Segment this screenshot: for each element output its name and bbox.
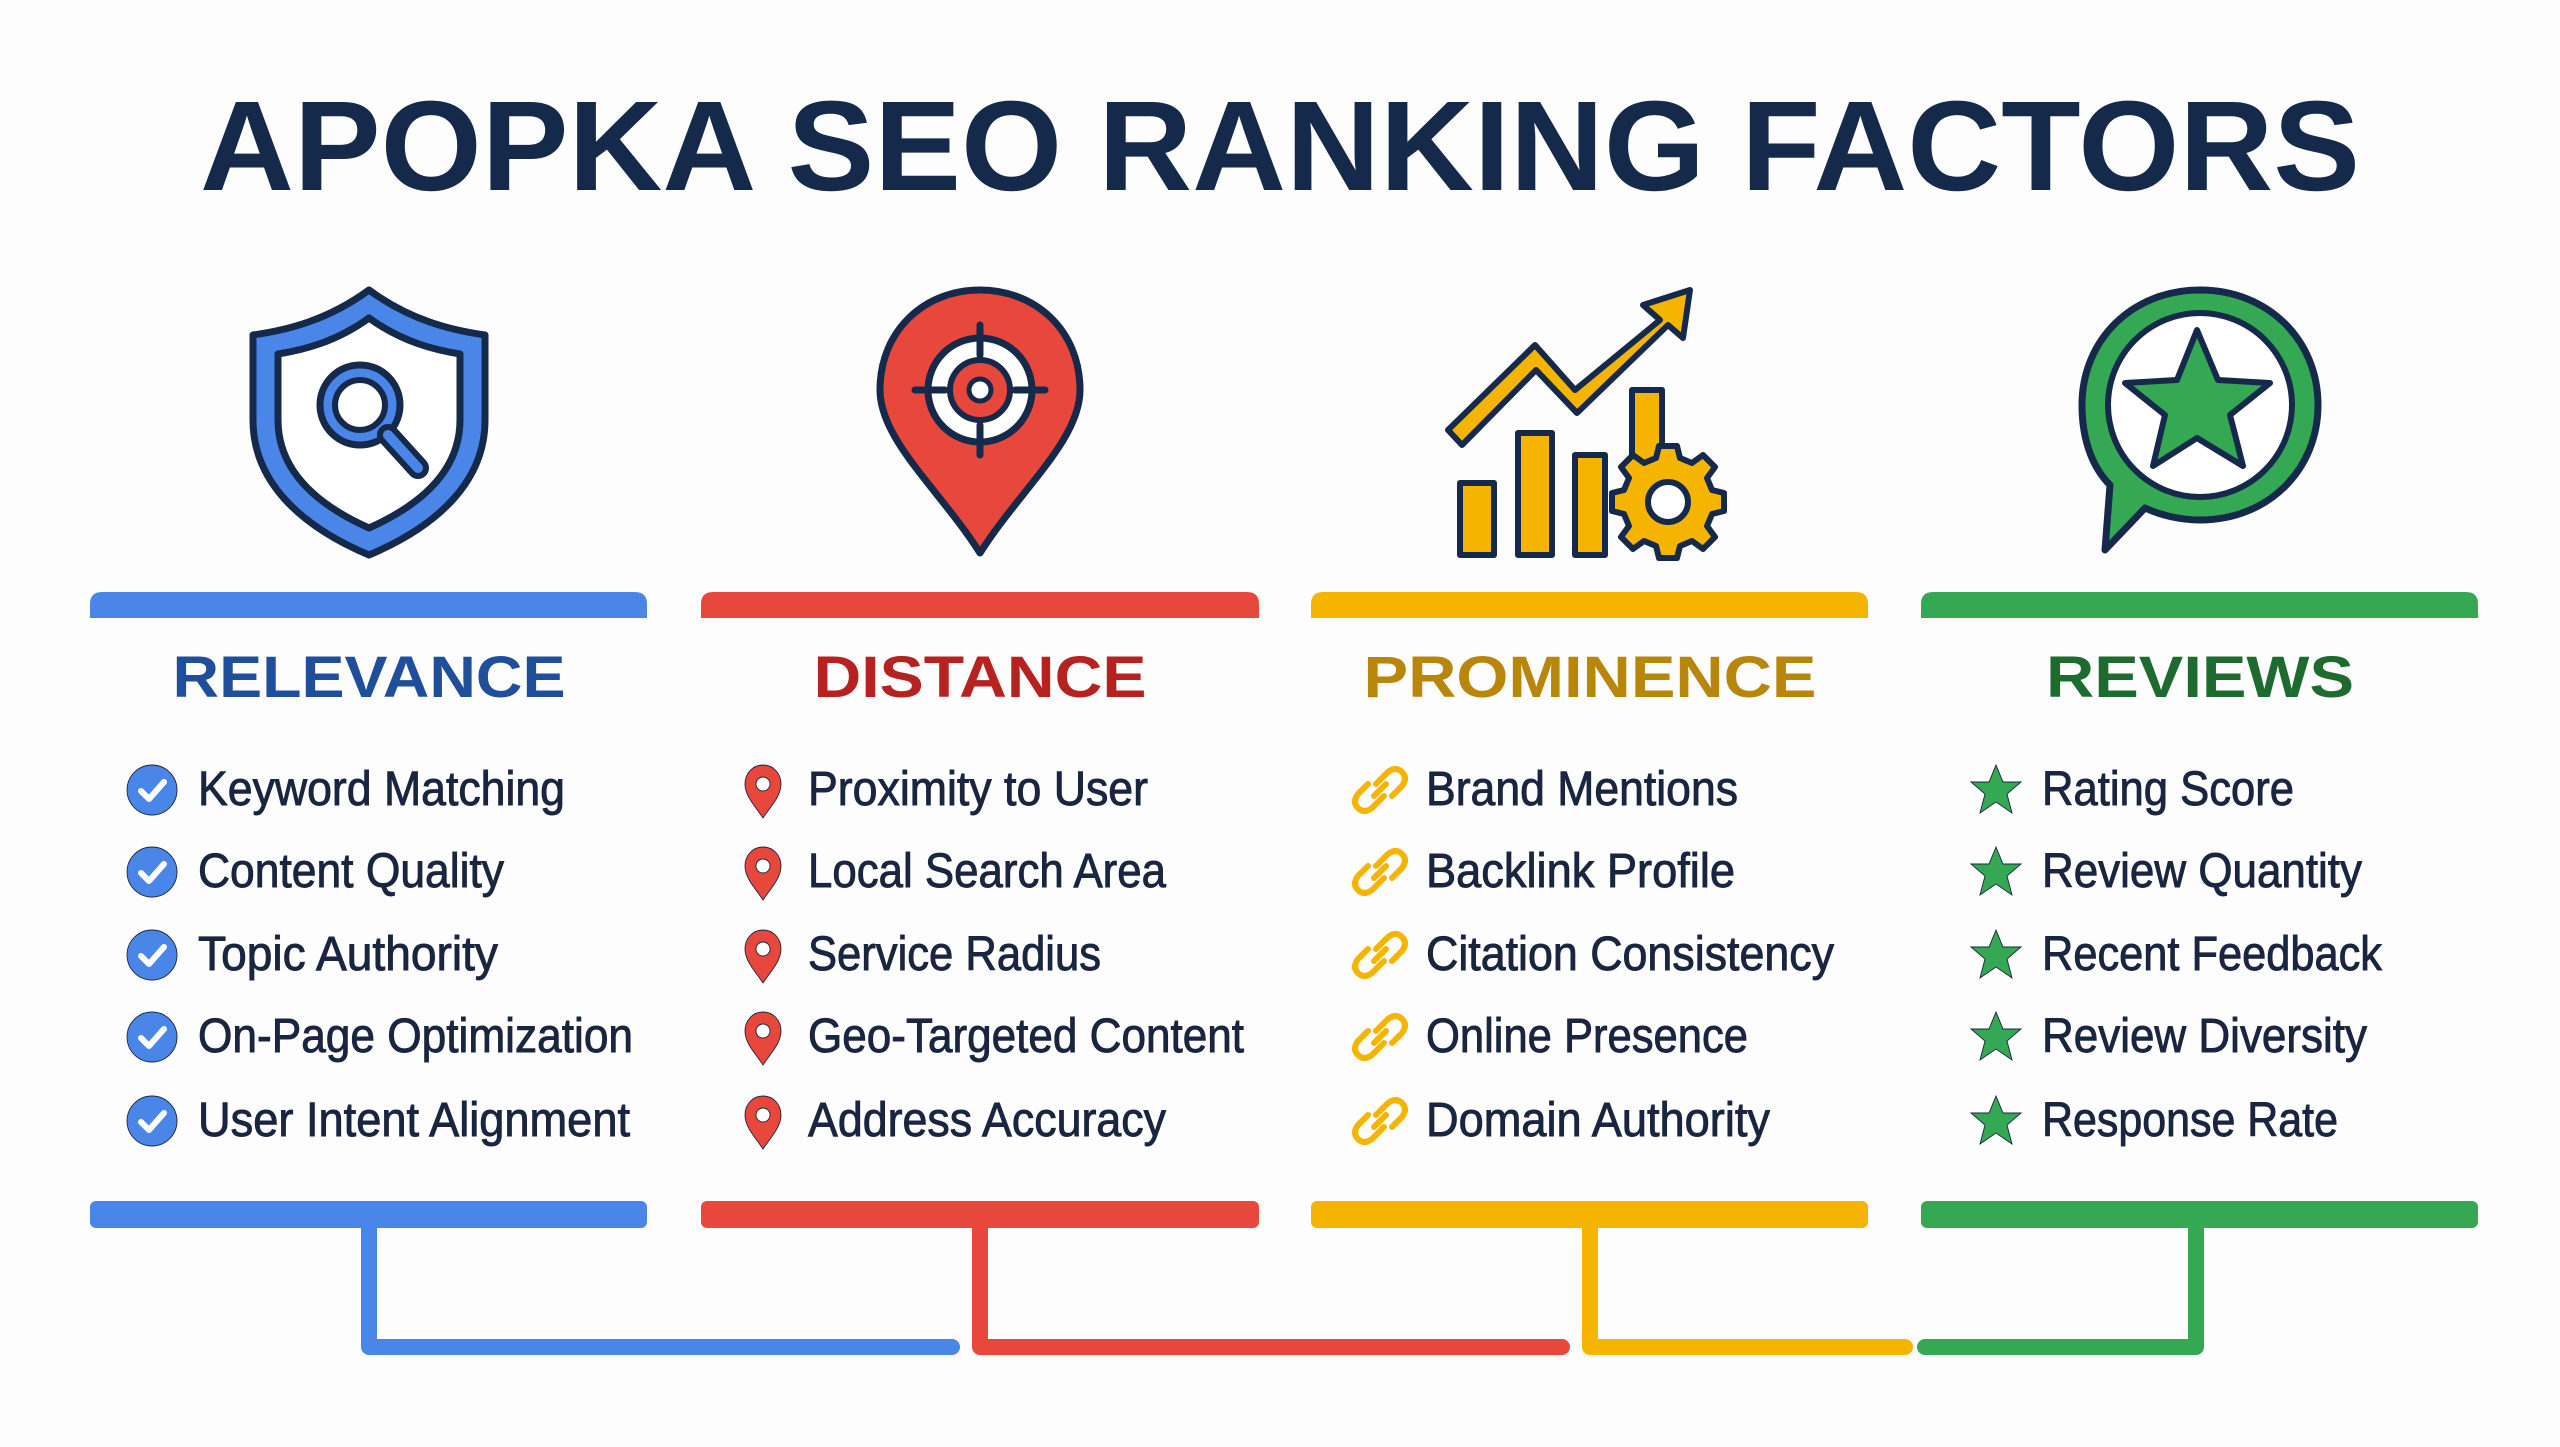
list: relevance: Keyword Matching — [198, 763, 565, 816]
list: reviews: Rating Score — [2042, 763, 2294, 816]
list: reviews: Recent Feedback — [2042, 928, 2383, 981]
list: prominence: Domain Authority — [1426, 1094, 1770, 1147]
list: distance: Local Search Area — [808, 845, 1166, 898]
list: relevance: Topic Authority — [198, 928, 498, 981]
heading: prominence: PROMINENCE — [1364, 645, 1816, 710]
list: relevance: On-Page Optimization — [198, 1010, 633, 1063]
list: distance: Service Radius — [808, 928, 1101, 981]
heading: reviews: REVIEWS — [2046, 645, 2354, 710]
list: distance — [745, 763, 1244, 1149]
list: reviews: Response Rate — [2042, 1094, 2338, 1147]
list: prominence: Brand Mentions — [1426, 763, 1738, 816]
heading: distance: DISTANCE — [814, 645, 1146, 710]
list: distance: Address Accuracy — [808, 1094, 1166, 1147]
list: relevance: User Intent Alignment — [198, 1094, 630, 1147]
connector lines — [369, 1228, 2196, 1347]
list: reviews: Review Quantity — [2042, 845, 2362, 898]
icon: shield with magnifier — [253, 290, 485, 555]
top bars — [90, 592, 2478, 618]
list: prominence: Online Presence — [1426, 1010, 1748, 1063]
icon: speech bubble with star — [2082, 290, 2318, 550]
list: reviews — [1971, 763, 2383, 1147]
list: prominence — [1355, 763, 1834, 1147]
bottom bars — [90, 1201, 2478, 1228]
list: prominence: Citation Consistency — [1426, 928, 1834, 981]
list: prominence: Backlink Profile — [1426, 845, 1735, 898]
list: reviews: Review Diversity — [2042, 1010, 2367, 1063]
list: distance: Geo-Targeted Content — [808, 1010, 1244, 1063]
title: APOPKA SEO RANKING FACTORS — [200, 75, 2360, 218]
list: relevance: Content Quality — [198, 845, 504, 898]
icon: location pin with target — [880, 290, 1080, 553]
heading: relevance: RELEVANCE — [172, 645, 566, 710]
list: relevance — [127, 763, 633, 1147]
icon: growth chart with gear — [1448, 290, 1724, 558]
list: distance: Proximity to User — [808, 763, 1148, 816]
